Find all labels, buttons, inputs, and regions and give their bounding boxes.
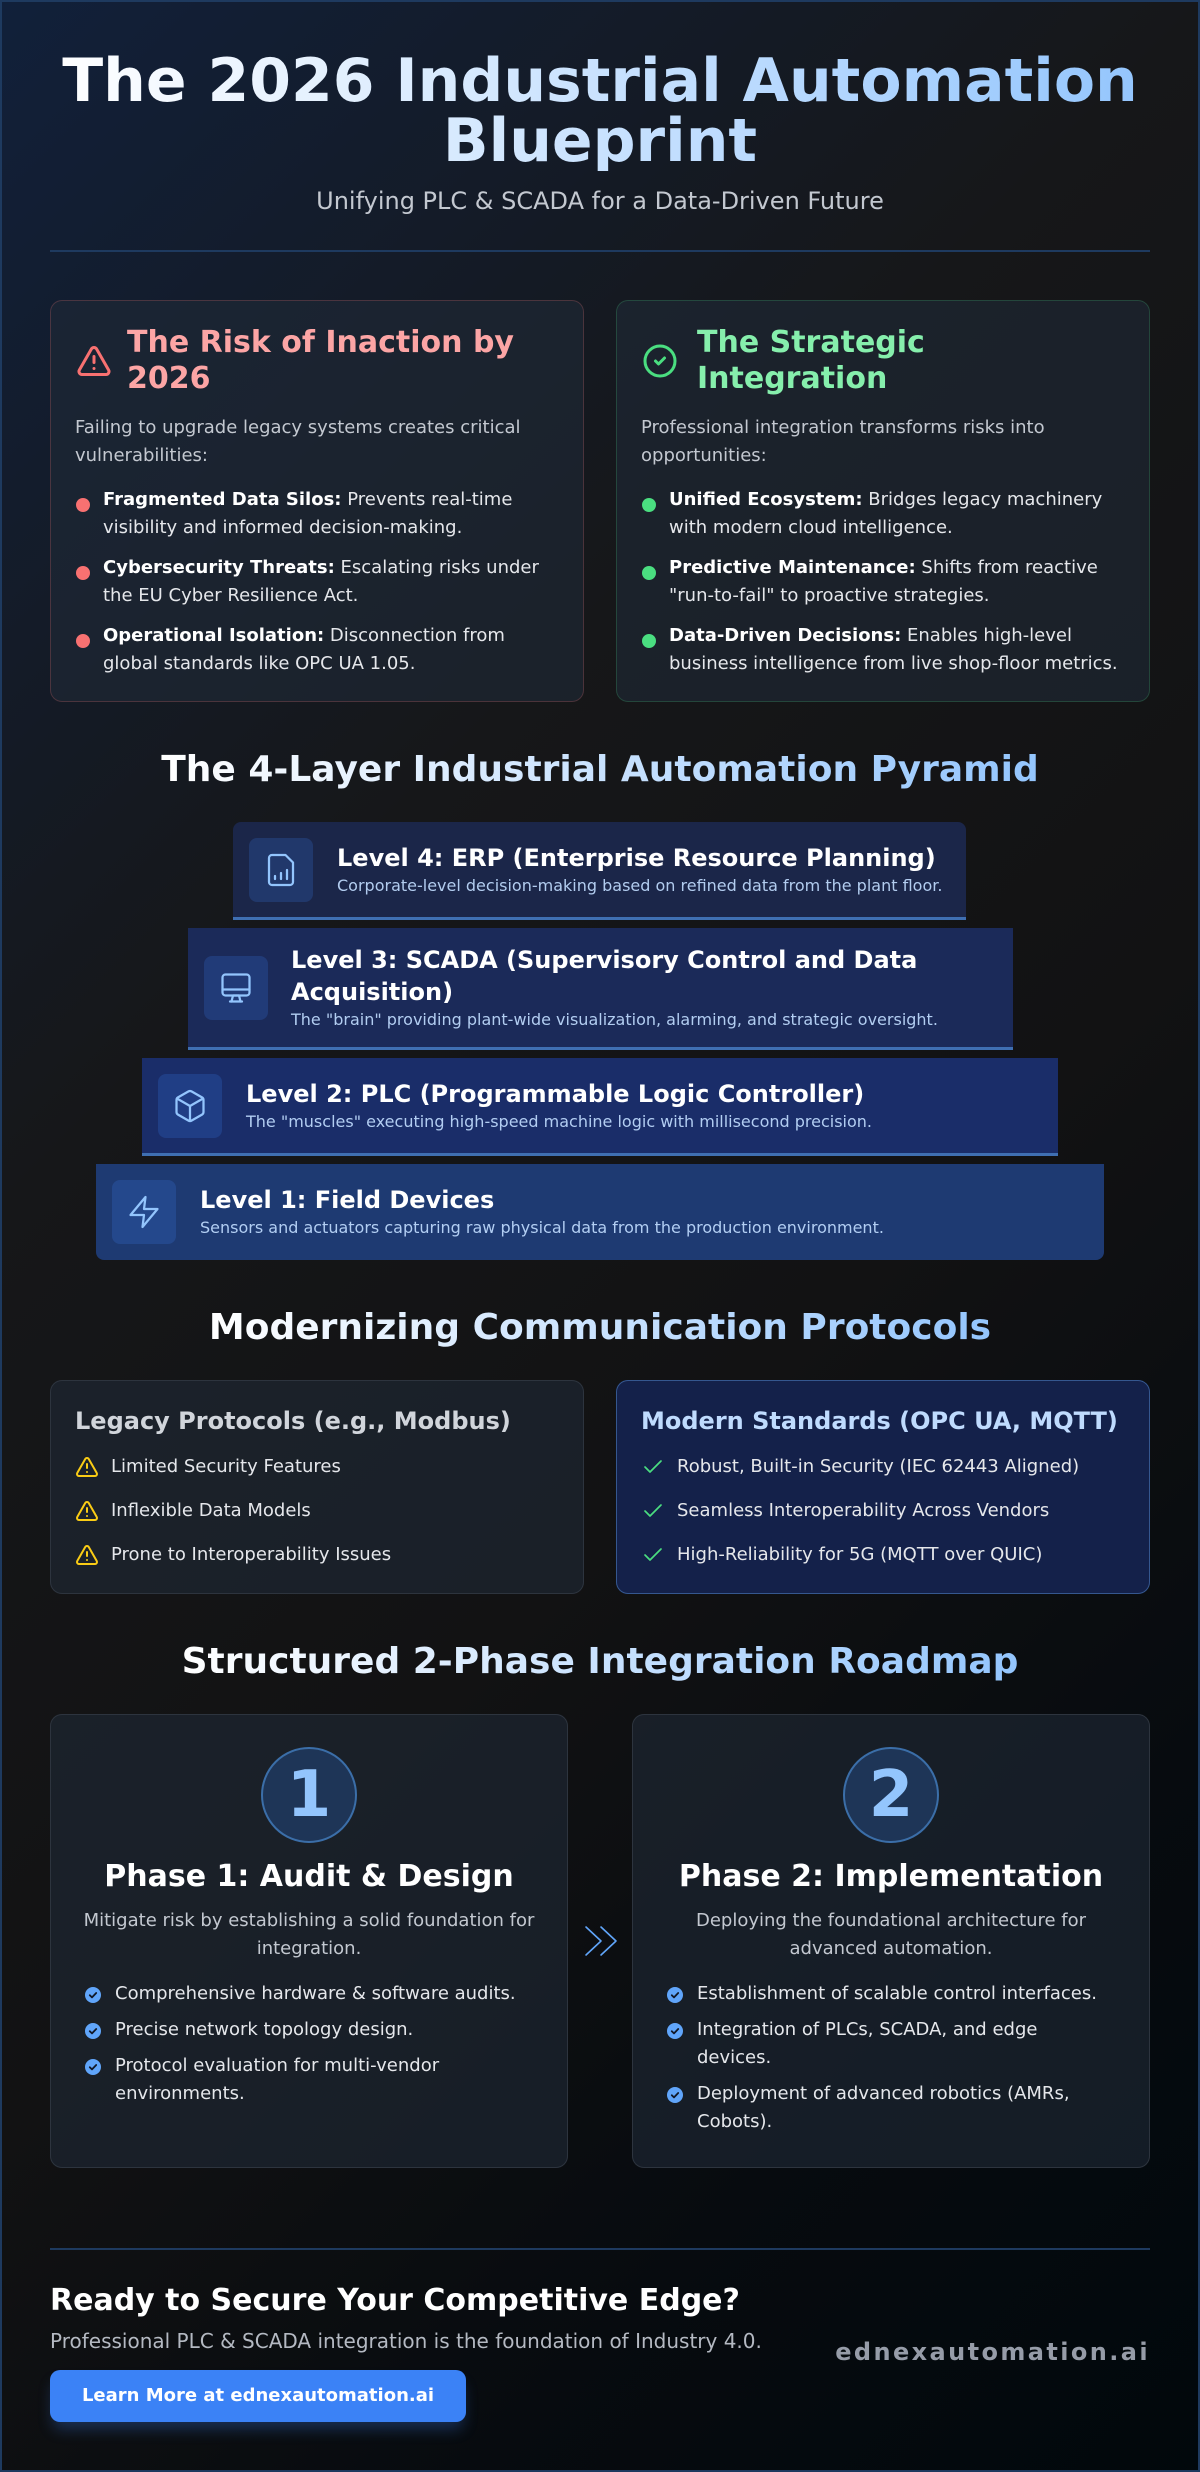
phase 1 number badge: 1 xyxy=(287,1758,331,1832)
title xyxy=(50,51,1150,171)
strategic bullet 2: "run-to-fail" to proactive strategies. xyxy=(669,585,990,606)
panel: phase 2 xyxy=(632,1714,1150,2168)
heading: protocols: Modernizing Communication Protocols xyxy=(209,1307,991,1348)
level 1 field devices xyxy=(96,1164,1104,1260)
panel: legacy protocols xyxy=(50,1380,584,1594)
phase 1 number badge xyxy=(261,1747,357,1843)
phase 1 description: Mitigate risk by establishing a solid foundation for xyxy=(84,1910,534,1931)
phase 2 item 3 xyxy=(667,2083,1070,2132)
call to action button xyxy=(50,2370,466,2422)
title: Blueprint xyxy=(443,106,757,176)
risk intro: Failing to upgrade legacy systems creates critical xyxy=(75,417,520,438)
footer heading: Ready to Secure Your Competitive Edge? xyxy=(50,2283,740,2318)
legacy item 1: Limited Security Features xyxy=(111,1456,341,1477)
strategic heading: Integration xyxy=(697,361,887,396)
phase 2 description: advanced automation. xyxy=(790,1938,992,1959)
icon: monitor xyxy=(204,956,268,1020)
title: The 2026 Industrial Automation xyxy=(62,46,1138,116)
phase 2 item 3: Deployment of advanced robotics (AMRs, xyxy=(697,2083,1070,2104)
panel: modern standards xyxy=(616,1380,1150,1594)
level 4 ERP xyxy=(233,822,966,920)
legacy item 3: Prone to Interoperability Issues xyxy=(111,1544,391,1565)
call to action button: Learn More at ednexautomation.ai xyxy=(82,2385,434,2406)
level 3 title: Acquisition) xyxy=(291,978,453,1006)
risk bullet 3: Operational Isolation: Disconnection from xyxy=(103,625,505,646)
level 2 PLC xyxy=(142,1058,1058,1156)
phase 1 item 3 xyxy=(85,2055,440,2104)
strategic bullet 1: Unified Ecosystem: Bridges legacy machinery xyxy=(669,489,1102,510)
heading: pyramid: The 4-Layer Industrial Automation Pyramid xyxy=(161,749,1039,790)
level 3 SCADA xyxy=(188,928,1013,1050)
panel: strategic integration xyxy=(616,300,1150,702)
risk heading xyxy=(127,325,514,396)
strategic heading xyxy=(697,325,925,396)
level 4 title: Level 4: ERP (Enterprise Resource Planning) xyxy=(337,844,936,872)
level 3 title xyxy=(291,946,917,1006)
phase 2 item 2: Integration of PLCs, SCADA, and edge xyxy=(697,2019,1037,2040)
phase 2 number badge xyxy=(843,1747,939,1843)
modern item 2: Seamless Interoperability Across Vendors xyxy=(677,1500,1049,1521)
risk bullet 2: Cybersecurity Threats: Escalating risks under xyxy=(103,557,539,578)
phase 2 item 3: Cobots). xyxy=(697,2111,772,2132)
subtitle: Unifying PLC & SCADA for a Data-Driven Future xyxy=(316,187,884,215)
arrow: chevrons between phases xyxy=(585,1926,617,1956)
phase 1 item 3: Protocol evaluation for multi-vendor xyxy=(115,2055,439,2076)
icon: check circle xyxy=(644,344,676,378)
risk intro: vulnerabilities: xyxy=(75,445,208,466)
phase 2 description: Deploying the foundational architecture for xyxy=(696,1910,1086,1931)
phase 1 item 3: environments. xyxy=(115,2083,245,2104)
risk bullet 2: the EU Cyber Resilience Act. xyxy=(103,585,358,606)
panel: phase 1 xyxy=(50,1714,568,2168)
level 1 title: Level 1: Field Devices xyxy=(200,1186,494,1214)
phase 2 item 1: Establishment of scalable control interfaces. xyxy=(697,1983,1097,2004)
strategic bullet 1 xyxy=(642,489,1102,538)
heading: roadmap: Structured 2-Phase Integration Roadmap xyxy=(182,1641,1018,1682)
risk bullet 1 xyxy=(76,489,512,538)
phase 2 item 2: devices. xyxy=(697,2047,771,2068)
risk heading: The Risk of Inaction by xyxy=(127,325,514,360)
legacy item 2: Inflexible Data Models xyxy=(111,1500,311,1521)
strategic bullet 1: with modern cloud intelligence. xyxy=(669,517,953,538)
strategic intro: opportunities: xyxy=(641,445,767,466)
strategic intro: Professional integration transforms risks into xyxy=(641,417,1045,438)
modern heading: Modern Standards (OPC UA, MQTT) xyxy=(641,1407,1118,1435)
phase 1 description xyxy=(84,1910,534,1959)
icon: file chart xyxy=(249,838,313,902)
risk bullet 1: visibility and informed decision-making. xyxy=(103,517,462,538)
risk bullet 1: Fragmented Data Silos: Prevents real-time xyxy=(103,489,512,510)
level 1 description: Sensors and actuators capturing raw physical data from the production environment. xyxy=(200,1218,884,1237)
phase 1 item 1: Comprehensive hardware & software audits. xyxy=(115,1983,516,2004)
strategic intro xyxy=(641,417,1045,466)
level 4 description: Corporate-level decision-making based on refined data from the plant floor. xyxy=(337,876,942,895)
phase 1 description: integration. xyxy=(257,1938,361,1959)
strategic bullet 3: Data-Driven Decisions: Enables high-level xyxy=(669,625,1072,646)
risk bullet 3 xyxy=(76,625,505,674)
icon: warning triangle xyxy=(77,346,110,376)
strategic bullet 2: Predictive Maintenance: Shifts from reactive xyxy=(669,557,1098,578)
risk bullet 2 xyxy=(76,557,539,606)
brand domain: ednexautomation.ai xyxy=(835,2338,1150,2366)
phase 2 item 2 xyxy=(667,2019,1037,2068)
level 2 description: The "muscles" executing high-speed machine logic with millisecond precision. xyxy=(246,1112,872,1131)
strategic heading: The Strategic xyxy=(697,325,925,360)
level 3 description: The "brain" providing plant-wide visualization, alarming, and strategic oversight. xyxy=(291,1010,938,1029)
risk intro xyxy=(75,417,520,466)
pyramid chart xyxy=(96,822,1104,1260)
risk heading: 2026 xyxy=(127,361,210,396)
strategic bullet 3 xyxy=(642,625,1118,674)
phase 2 number badge: 2 xyxy=(869,1758,913,1832)
strategic bullet 3: business intelligence from live shop-floor metrics. xyxy=(669,653,1118,674)
level 3 title: Level 3: SCADA (Supervisory Control and Data xyxy=(291,946,917,974)
modern item 3: High-Reliability for 5G (MQTT over QUIC) xyxy=(677,1544,1042,1565)
strategic bullet 2 xyxy=(642,557,1098,606)
phase 2 title: Phase 2: Implementation xyxy=(679,1859,1103,1894)
icon: lightning bolt xyxy=(112,1180,176,1244)
phase 2 description xyxy=(696,1910,1086,1959)
footer text: Professional PLC & SCADA integration is the foundation of Industry 4.0. xyxy=(50,2329,762,2353)
phase 1 title: Phase 1: Audit & Design xyxy=(104,1859,514,1894)
level 2 title: Level 2: PLC (Programmable Logic Controller) xyxy=(246,1080,864,1108)
risk bullet 3: global standards like OPC UA 1.05. xyxy=(103,653,415,674)
legacy heading: Legacy Protocols (e.g., Modbus) xyxy=(75,1407,511,1435)
icon: cube xyxy=(158,1074,222,1138)
modern item 1: Robust, Built-in Security (IEC 62443 Aligned) xyxy=(677,1456,1079,1477)
phase 1 item 2: Precise network topology design. xyxy=(115,2019,413,2040)
panel: risk of inaction xyxy=(50,300,584,702)
